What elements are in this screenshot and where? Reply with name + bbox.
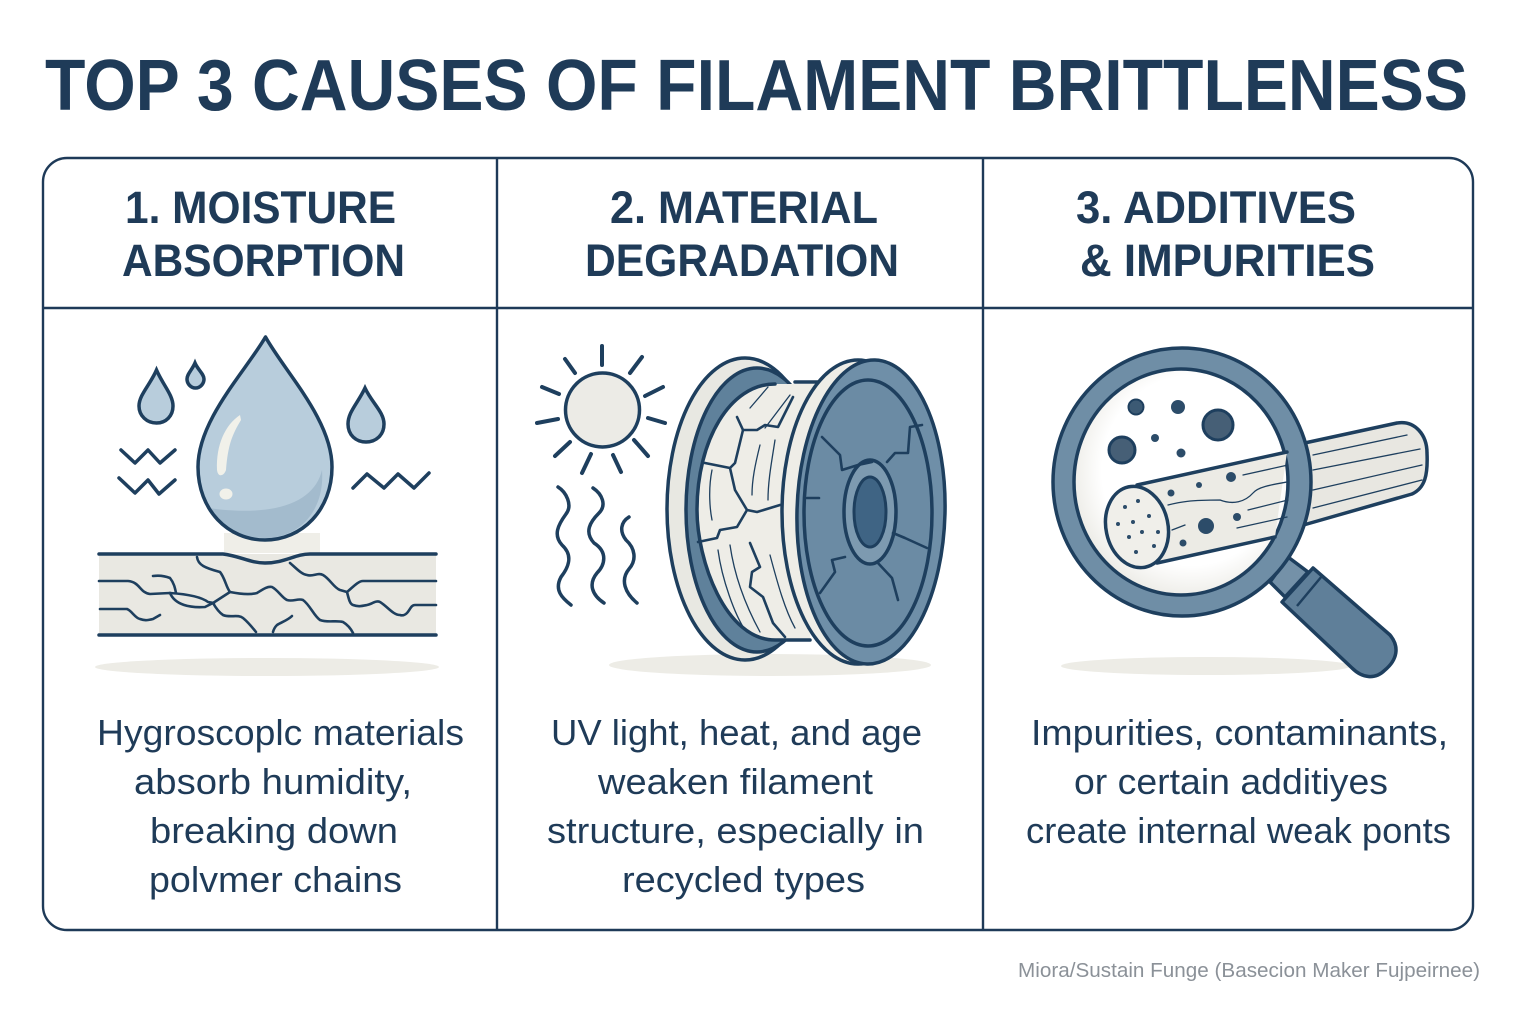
heading: additives and impurities <box>1076 182 1375 286</box>
text: additives description: create internal weak ponts <box>1026 810 1451 851</box>
heading: additives and impurities: & IMPURITIES <box>1080 235 1375 286</box>
icon: magnifying glass over filament <box>1053 348 1427 677</box>
text: additives description: or certain additiyes <box>1074 761 1388 802</box>
text: moisture description: Hygroscoplc materials <box>97 712 464 753</box>
text: moisture description: absorb humidity, <box>134 761 412 802</box>
text: additives description <box>1026 712 1451 851</box>
text: additives description: Impurities, contaminants, <box>1031 712 1448 753</box>
icon: water drops over cracked filament <box>95 337 439 676</box>
icon: sun and heat <box>537 346 665 605</box>
footer source note: Miora/Sustain Funge (Basecion Maker Fujpeirnee) <box>1018 960 1480 982</box>
panel: moisture absorption <box>43 158 497 930</box>
text: degradation description: UV light, heat, and age <box>551 712 922 753</box>
panel: additives and impurities <box>983 158 1473 930</box>
heading: moisture absorption <box>122 182 405 286</box>
text: degradation description: structure, especially in <box>547 810 924 851</box>
heading: additives and impurities: 3. ADDITIVES <box>1076 182 1356 233</box>
heading: material degradation: 2. MATERIAL <box>610 182 878 233</box>
heading: material degradation <box>585 182 899 286</box>
text: degradation description <box>547 712 924 900</box>
heading: material degradation: DEGRADATION <box>585 235 899 286</box>
heading: moisture absorption: ABSORPTION <box>122 235 405 286</box>
text: moisture description: polvmer chains <box>149 859 402 900</box>
panel: material degradation <box>497 158 983 930</box>
icon: cracked filament spool <box>609 358 949 676</box>
table frame <box>43 158 1473 930</box>
text: degradation description: weaken filament <box>597 761 873 802</box>
heading: moisture absorption: 1. MOISTURE <box>125 182 396 233</box>
text: degradation description: recycled types <box>622 859 865 900</box>
text: moisture description <box>97 712 464 900</box>
text: moisture description: breaking down <box>150 810 398 851</box>
